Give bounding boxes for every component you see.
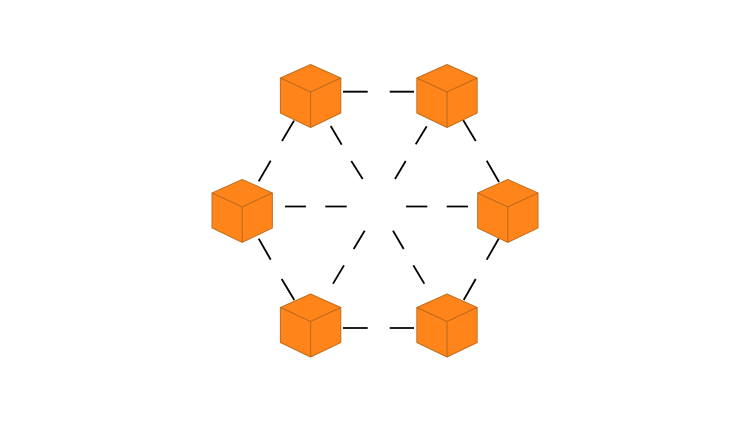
icon: cube bottom right	[417, 294, 477, 357]
icon: cube top left	[280, 64, 341, 128]
icon: cube middle left	[212, 179, 272, 242]
icon: cube top right	[417, 64, 477, 128]
icon: cube bottom left	[280, 294, 341, 357]
icon: cube middle right	[478, 179, 538, 242]
connectors: dashed links	[259, 92, 499, 328]
